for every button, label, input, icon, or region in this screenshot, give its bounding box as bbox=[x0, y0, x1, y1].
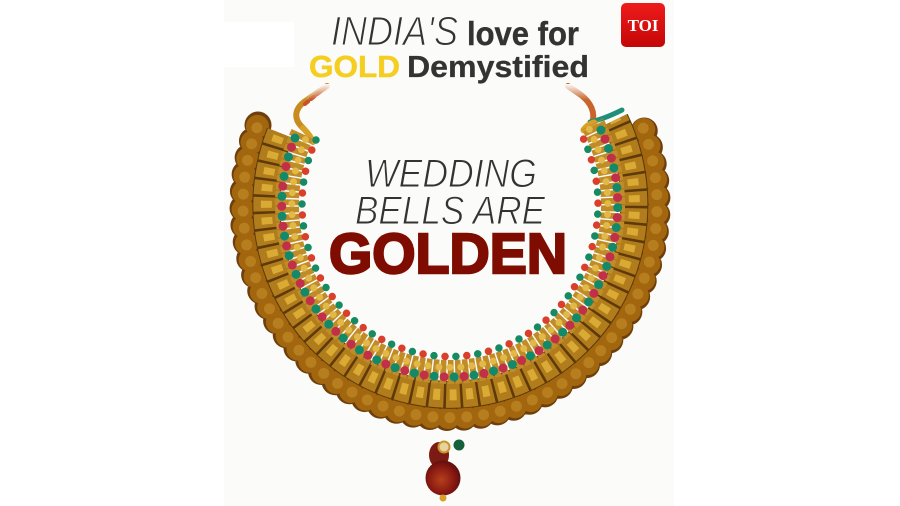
gold setting band bbox=[287, 124, 613, 372]
gem row one bbox=[282, 128, 618, 377]
pendant main bead bbox=[426, 460, 460, 496]
necklace bbox=[243, 84, 657, 418]
title line: GOLDEN: GOLDEN bbox=[329, 222, 567, 286]
inner gold beads bbox=[292, 125, 608, 367]
title line: BELLS ARE: BELLS ARE bbox=[355, 189, 546, 233]
pendant gold tip bbox=[440, 494, 446, 502]
cone ring bbox=[266, 120, 634, 395]
centre title bbox=[329, 152, 567, 286]
outer coin ring bbox=[243, 120, 657, 418]
pendant upper bead bbox=[429, 442, 449, 468]
logo: TOI bbox=[621, 3, 665, 47]
pendant bbox=[426, 440, 464, 502]
background panel bbox=[224, 0, 674, 506]
pendant green bead bbox=[454, 440, 464, 450]
logo: TOI: TOI bbox=[628, 16, 659, 35]
right strap bbox=[568, 86, 622, 130]
title line: WEDDING: WEDDING bbox=[365, 152, 537, 196]
heading words: love for: love for bbox=[467, 15, 579, 52]
white patch bbox=[224, 22, 294, 67]
pendant gold clasp bbox=[438, 442, 450, 452]
left strap bbox=[296, 86, 327, 142]
heading bbox=[309, 8, 589, 84]
heading word: GOLD: GOLD bbox=[309, 49, 400, 84]
gem row two bbox=[302, 130, 598, 357]
heading word: Demystified: Demystified bbox=[407, 49, 589, 84]
strap fade bbox=[290, 84, 600, 100]
heading word: INDIA'S: INDIA'S bbox=[331, 8, 458, 54]
